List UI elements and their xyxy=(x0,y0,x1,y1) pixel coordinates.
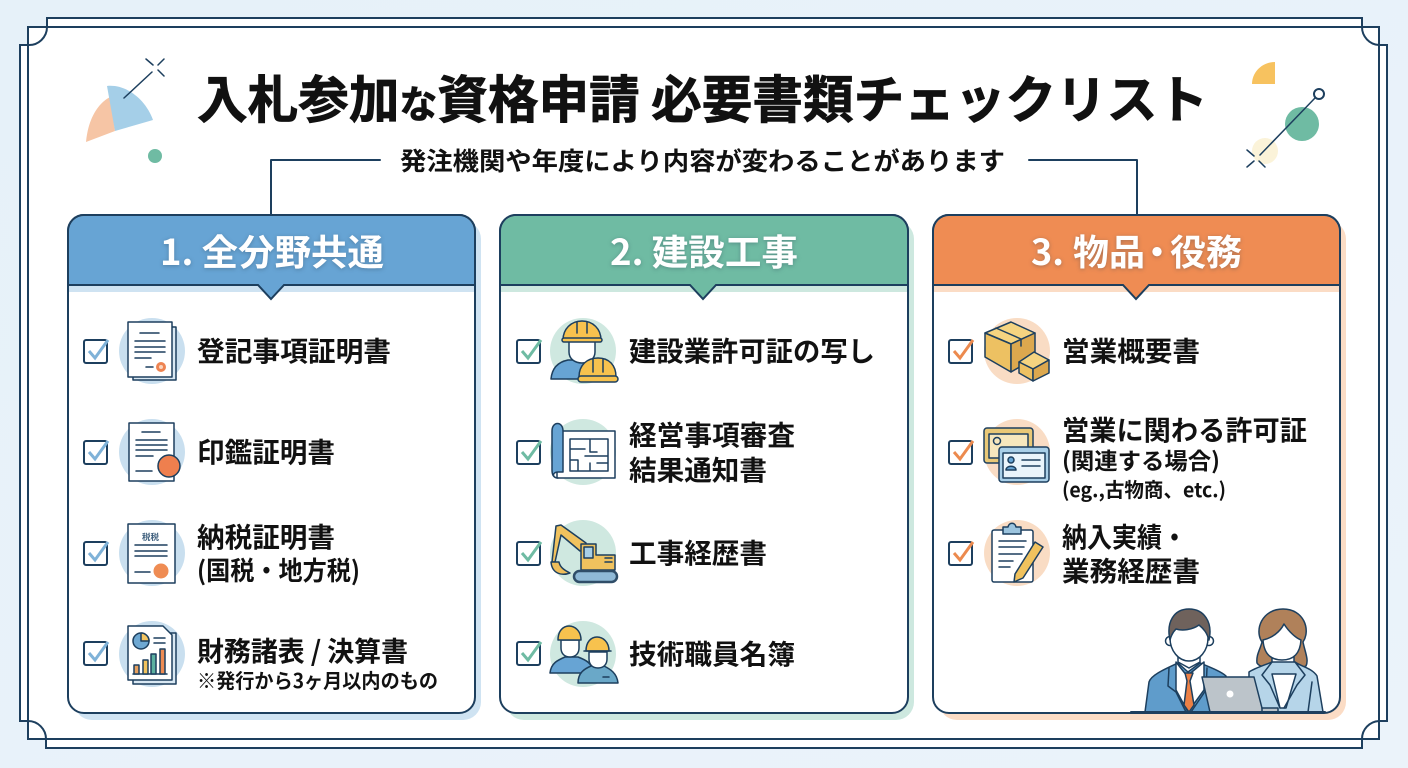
item: 技術職員名簿 xyxy=(517,621,795,687)
item: 営業に関わる許可証 xyxy=(949,408,1307,503)
heading: 物品 xyxy=(1073,224,1145,276)
item: 登記事項証明書: 登記事項証明書 xyxy=(197,329,391,369)
panel: 物品・役務 xyxy=(933,215,1346,720)
decoration: left fan xyxy=(86,59,164,163)
heading: 2. 建設工事 xyxy=(610,224,798,276)
item: 営業に関わる許可証: (eg.,古物商、etc.) xyxy=(1062,474,1226,503)
item: 財務諸表 / 決算書: ※発行から3ヶ月以内のもの xyxy=(197,665,438,694)
item: 納入実績・業務経歴書: 納入実績・ xyxy=(1062,515,1187,555)
item: 経営事項審査 結果通知書: 経営事項審査 xyxy=(629,413,795,453)
item: 建設業許可証の写し xyxy=(517,318,875,384)
item: 経営事項審査 結果通知書 xyxy=(517,413,795,488)
heading: 役務 xyxy=(1170,224,1242,276)
item: 営業概要書: 営業概要書 xyxy=(1062,329,1200,369)
item: 印鑑証明書 xyxy=(84,419,335,485)
decoration: right shapes xyxy=(1247,62,1324,167)
subtitle: 発注機関や年度により内容が変わることがあります xyxy=(400,142,1005,178)
item: 建設業許可証の写し: 建設業許可証の写し xyxy=(629,329,875,369)
item: 納税証明書: 税税 xyxy=(142,531,160,543)
item: 財務諸表 / 決算書 xyxy=(84,621,438,694)
panel: 建設工事 xyxy=(500,215,914,720)
item: 工事経歴書 xyxy=(517,520,767,586)
item: 技術職員名簿: 技術職員名簿 xyxy=(629,632,795,672)
item: 印鑑証明書: 印鑑証明書 xyxy=(197,430,335,470)
panel: 全分野共通 xyxy=(68,215,481,720)
item: 営業概要書 xyxy=(949,318,1200,384)
item: 営業に関わる許可証: 営業に関わる許可証 xyxy=(1062,408,1307,448)
item: 財務諸表 / 決算書: 財務諸表 / 決算書 xyxy=(197,629,408,669)
illustration: two business people with laptop xyxy=(1131,609,1325,712)
heading: ・ xyxy=(1139,224,1175,276)
item: 納税証明書 xyxy=(84,515,360,588)
title: 入札参加な資格申請 必要書類チェックリスト xyxy=(197,59,1208,133)
item: 納税証明書: (国税・地方税) xyxy=(197,551,360,588)
item: 工事経歴書: 工事経歴書 xyxy=(629,531,767,571)
heading: 3. xyxy=(1031,224,1064,276)
item: 営業に関わる許可証: (関連する場合) xyxy=(1062,442,1220,476)
item: 納入実績・業務経歴書 xyxy=(949,515,1200,589)
item: 登記事項証明書 xyxy=(84,318,391,384)
item: 経営事項審査 結果通知書: 結果通知書 xyxy=(629,448,767,488)
item: 納税証明書: 納税証明書 xyxy=(197,515,335,555)
item: 納入実績・業務経歴書: 業務経歴書 xyxy=(1062,549,1200,589)
heading: 1. 全分野共通 xyxy=(160,224,384,276)
connector lines xyxy=(271,160,1137,215)
